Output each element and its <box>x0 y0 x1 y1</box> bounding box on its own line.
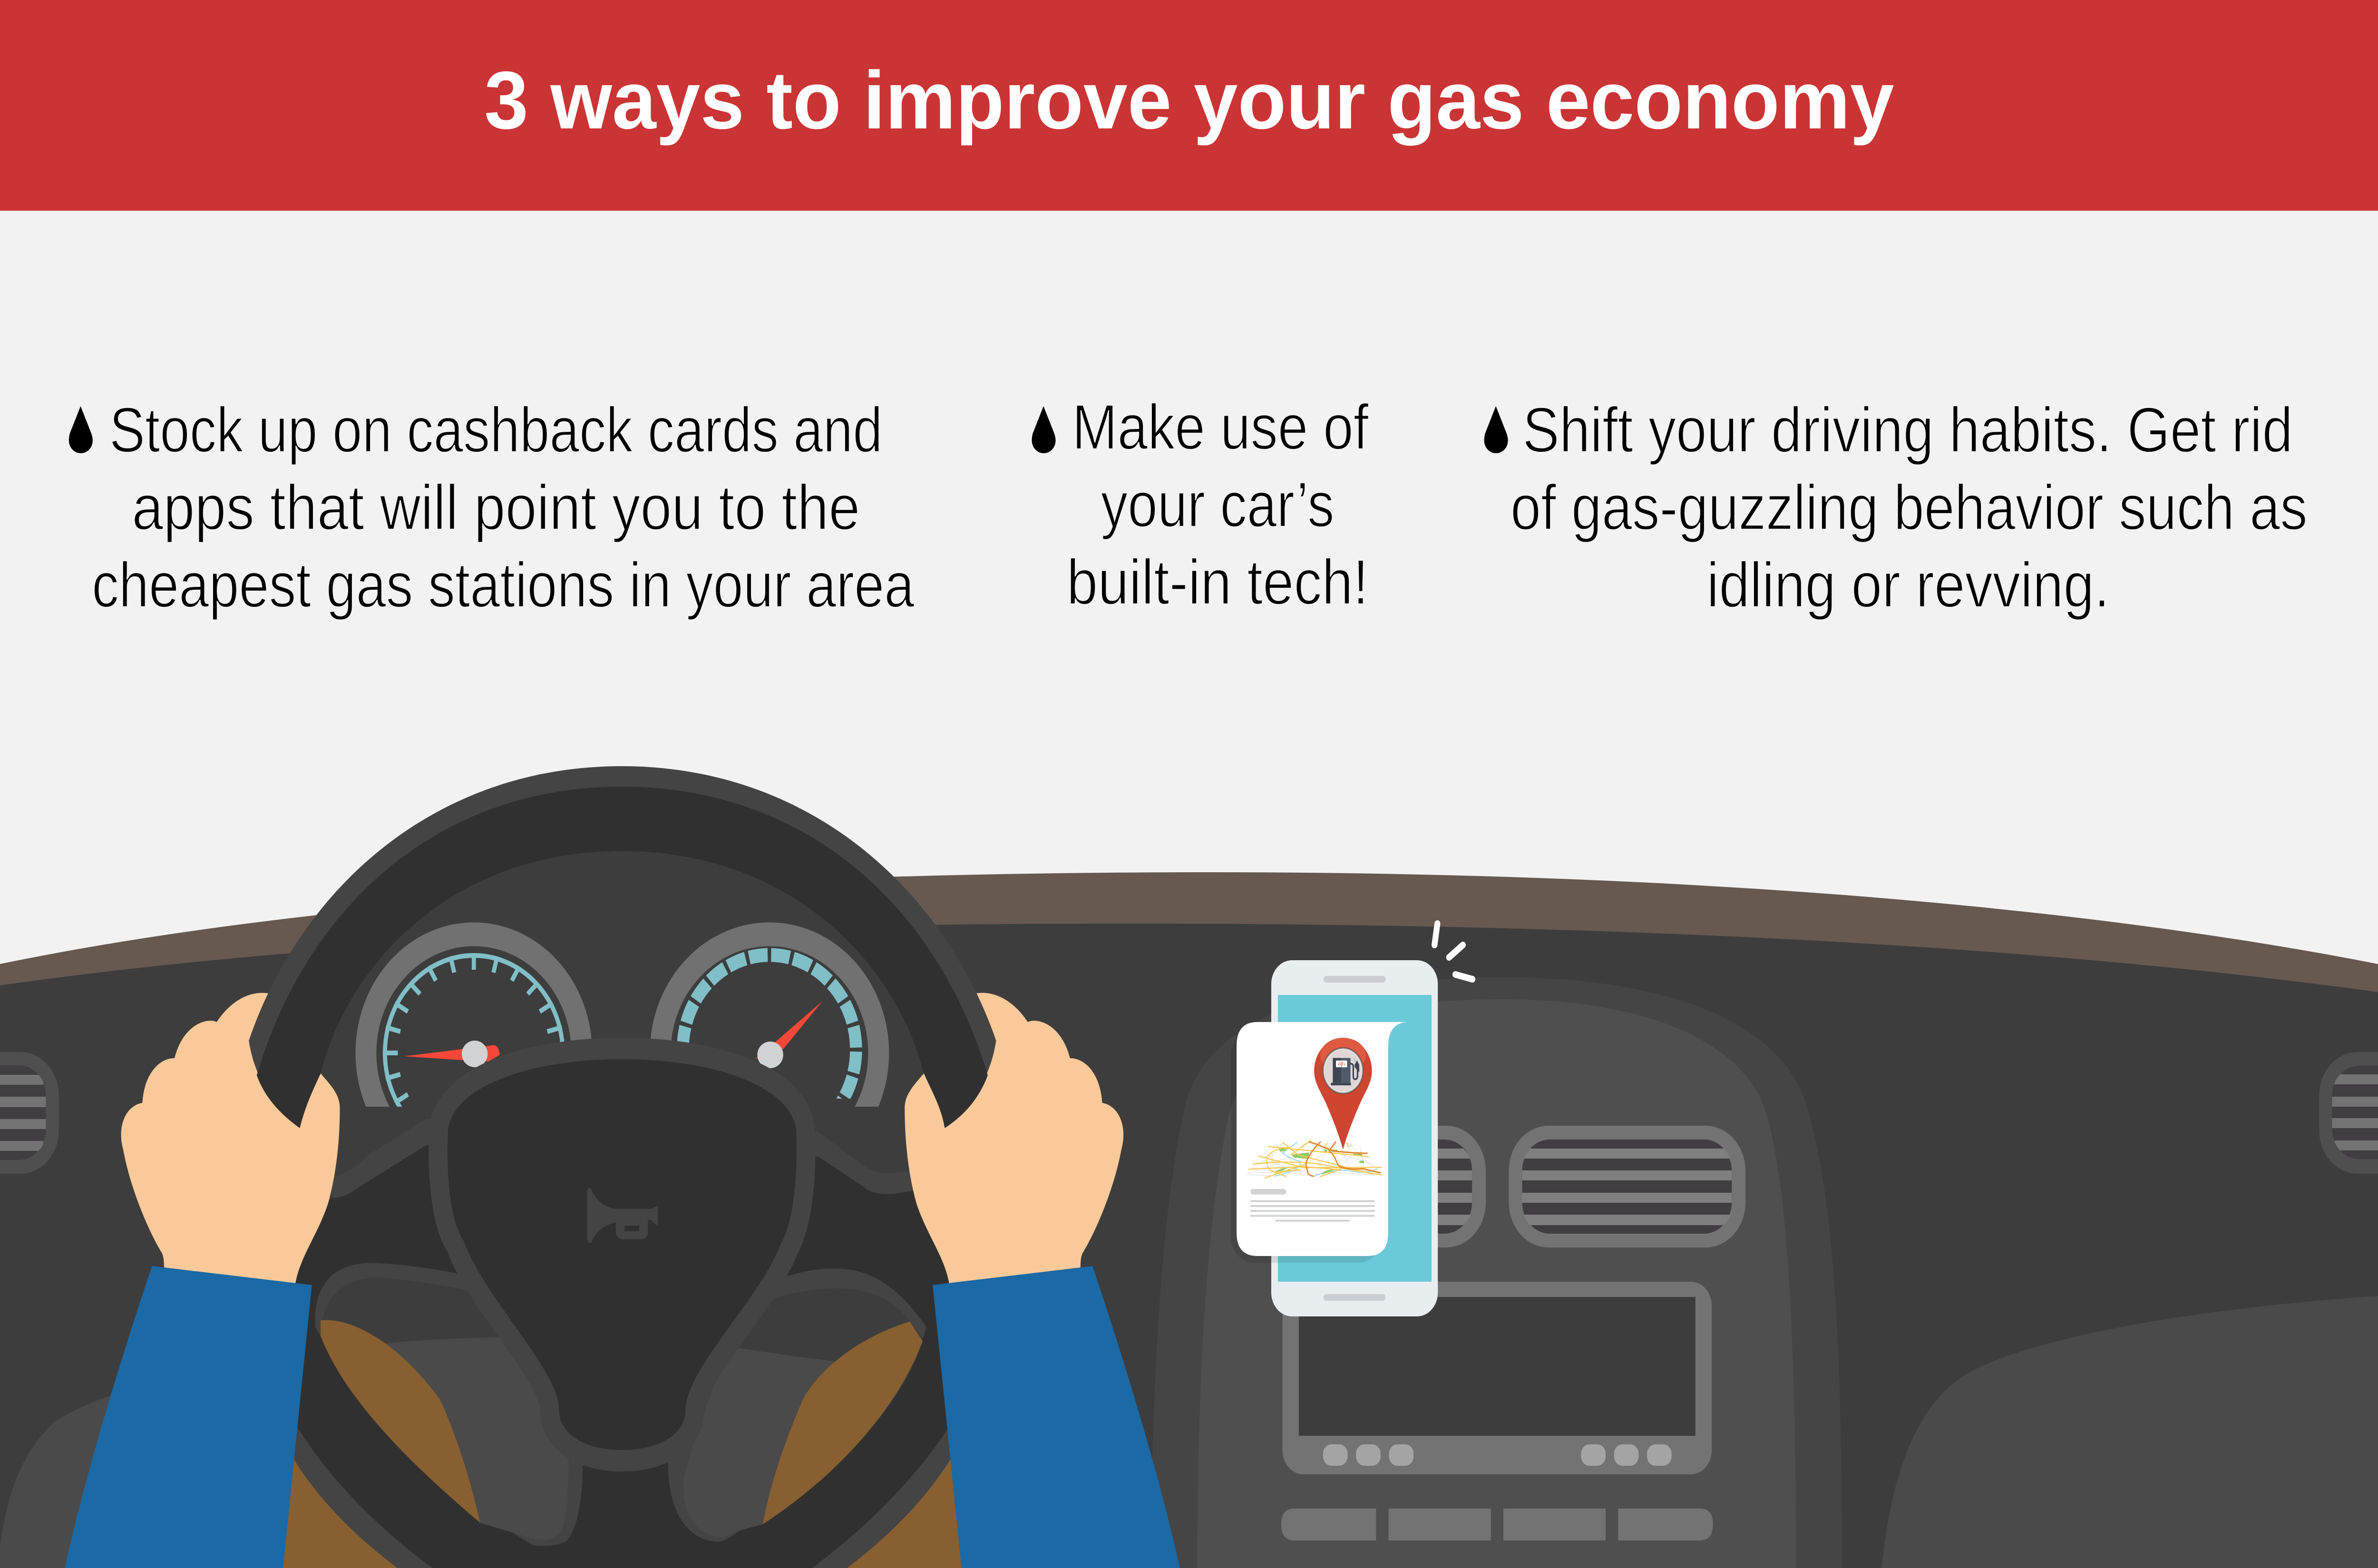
icon: fuel drop 2 <box>1032 406 1056 453</box>
smartphone <box>1231 924 1472 1316</box>
icon: fuel drop 1 <box>69 406 93 453</box>
left sleeve <box>65 1266 312 1568</box>
tip 1 text: Stock up on cashback cards and <box>109 394 883 466</box>
speedometer ticks <box>382 953 564 1107</box>
center vent left <box>1294 1126 1486 1247</box>
car dashboard <box>0 766 2378 1568</box>
speedometer needle <box>404 1045 500 1062</box>
climate buttons <box>1281 1509 1713 1540</box>
center console <box>1150 977 1842 1568</box>
wheel outer band <box>272 1379 973 1568</box>
icon: gas pump <box>1331 1058 1359 1085</box>
steering pad <box>448 1059 797 1450</box>
tip 1: cashback cards <box>69 394 915 621</box>
title: 3 ways to improve your gas economy <box>484 55 1894 146</box>
tip 2 text: Make use of <box>1072 391 1369 463</box>
steering wheel lower <box>267 1059 977 1568</box>
map pin <box>1314 1038 1372 1149</box>
left seat <box>0 1377 175 1568</box>
radio unit <box>1283 1282 1712 1474</box>
right spoke window <box>668 1268 926 1542</box>
header banner <box>0 0 2378 211</box>
fuel gauge segments <box>677 948 862 1099</box>
tip 3 text <box>1511 394 2308 621</box>
card content <box>1247 1038 1382 1222</box>
steering wheel upper arc <box>249 766 996 1128</box>
tip 3: driving habits <box>1484 394 2308 621</box>
tip 3 text: Shift your driving habits. Get rid <box>1522 394 2293 466</box>
left hand <box>121 993 340 1289</box>
tip 3 text: idling or revving. <box>1706 549 2110 621</box>
right side vent <box>2319 1052 2378 1174</box>
phone screen <box>1278 995 1432 1282</box>
wheel spokes <box>332 1119 915 1198</box>
wheel interior backdrop <box>321 851 924 1141</box>
tip 1 text: cheapest gas stations in your area <box>92 549 915 621</box>
city map <box>1247 1140 1382 1178</box>
right hand <box>905 993 1123 1289</box>
dashboard body <box>0 924 2378 1568</box>
right sleeve <box>933 1266 1180 1568</box>
tip 3 text: of gas-guzzling behavior such as <box>1511 472 2308 543</box>
card text lines <box>1250 1189 1374 1222</box>
speedometer hub <box>462 1041 487 1067</box>
wheel grip <box>257 787 988 1128</box>
left gauge <box>356 923 592 1107</box>
tip 2 text <box>1067 391 1369 618</box>
fuel gauge needle <box>755 1001 822 1059</box>
radio buttons <box>1323 1444 1672 1466</box>
right seat <box>1881 1296 2378 1568</box>
console inner <box>1198 999 1796 1568</box>
center vent right <box>1509 1126 1745 1247</box>
notification shadow <box>1231 1030 1382 1263</box>
tip 2 text: built-in tech! <box>1067 546 1368 618</box>
left side vent <box>0 1052 59 1174</box>
wheel lower body <box>275 1145 969 1568</box>
driver legs <box>267 1427 977 1568</box>
fuel gauge hub <box>757 1042 783 1068</box>
icon: horn <box>587 1188 658 1243</box>
dashboard trim <box>0 872 2378 1046</box>
left spoke window <box>315 1263 583 1546</box>
tip 2 text: your car’s <box>1101 469 1334 540</box>
icon: fuel drop 3 <box>1484 406 1508 453</box>
notification sparkle <box>1434 924 1472 979</box>
tip 1 text <box>92 394 915 621</box>
tip 2: built-in tech <box>1032 391 1369 618</box>
tip 1 text: apps that will point you to the <box>132 472 860 543</box>
console outer <box>1150 977 1842 1568</box>
right gauge <box>651 923 889 1107</box>
notification card <box>1237 1022 1409 1256</box>
phone speakers <box>1324 976 1385 1301</box>
phone body <box>1271 960 1438 1316</box>
